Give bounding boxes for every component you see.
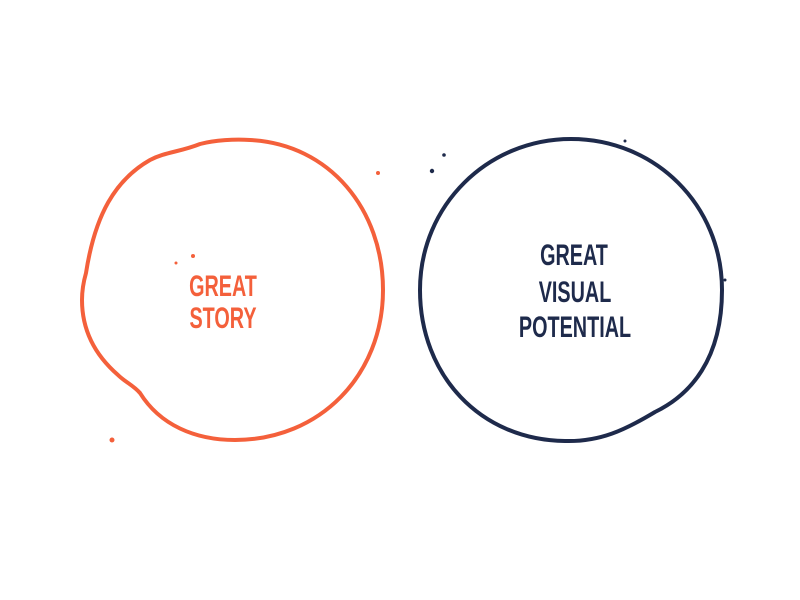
- circle: great story: [82, 140, 383, 440]
- text: great story: STORY: [189, 302, 257, 335]
- text: great visual potential: POTENTIAL: [519, 311, 631, 344]
- text: great visual potential: GREAT: [540, 239, 608, 272]
- text: great visual potential: [519, 239, 631, 344]
- text: great visual potential: VISUAL: [539, 276, 611, 309]
- text: great story: GREAT: [189, 270, 257, 303]
- text: great story: [189, 270, 257, 335]
- decorative dots: [110, 140, 726, 442]
- circle: great visual potential: [420, 139, 722, 441]
